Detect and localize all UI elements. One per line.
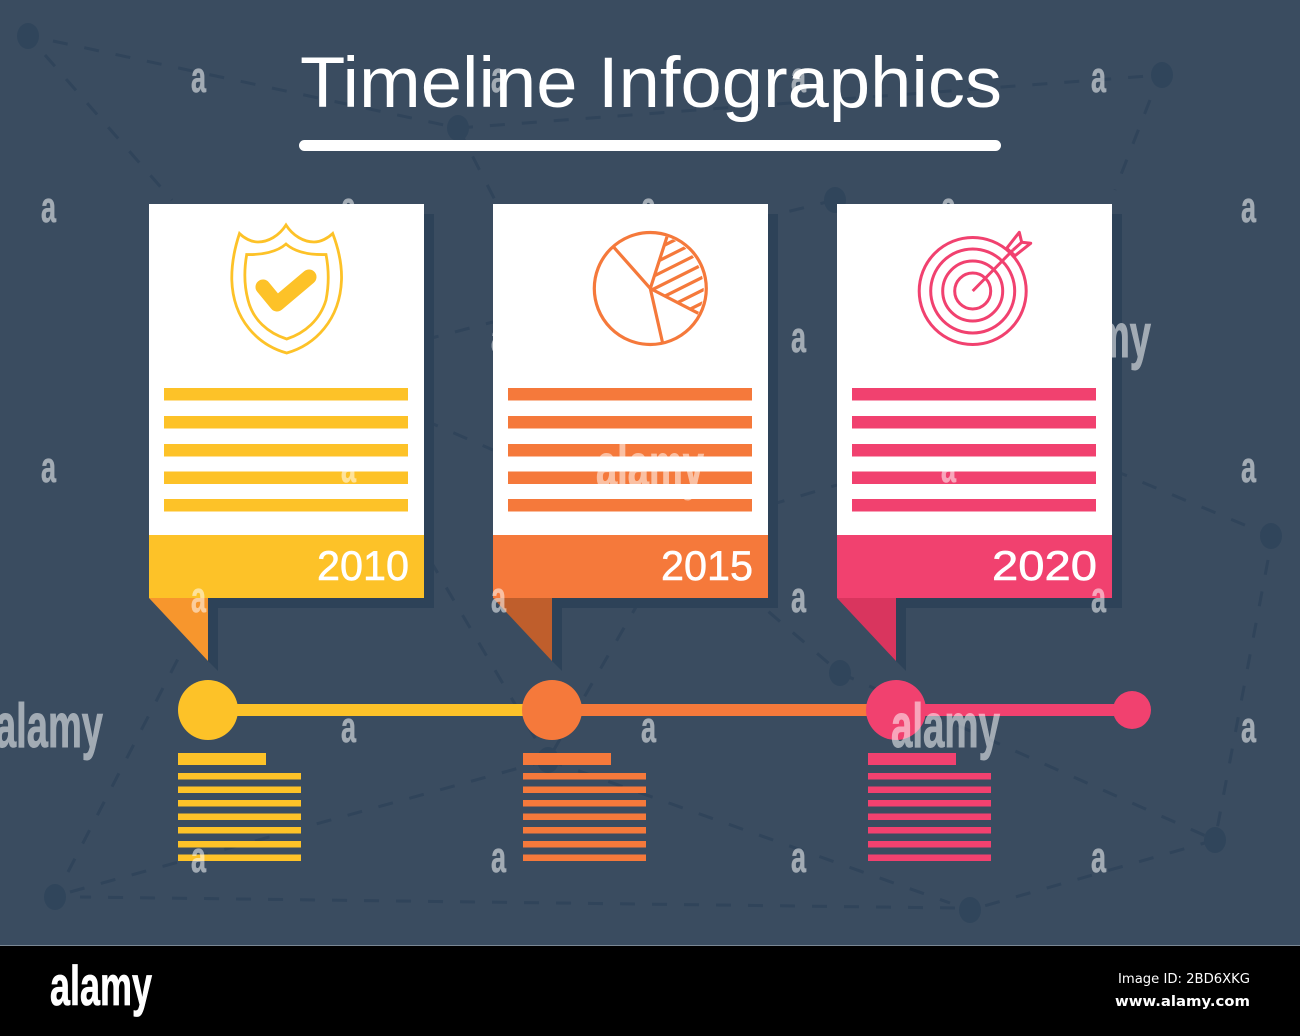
title underline (299, 140, 1001, 151)
watermark marks: a (491, 573, 506, 622)
text block: 2010 (178, 753, 301, 861)
year label 2020: 2020 (992, 542, 1097, 589)
text lines (508, 388, 752, 512)
node 2015 (522, 680, 582, 740)
end node (1113, 691, 1151, 729)
year label 2015: 2015 (661, 542, 753, 589)
watermark marks: a (1091, 53, 1106, 102)
watermark marks: a (41, 443, 56, 492)
watermark marks: a (791, 53, 806, 102)
title: Timeline Infographics (300, 44, 1002, 123)
footer bar (0, 945, 1300, 1036)
icon: target with arrow (919, 232, 1031, 344)
pointer tail (149, 598, 208, 661)
node 2010 (178, 680, 238, 740)
panel: 2010 card (149, 204, 434, 671)
year label 2010: 2010 (317, 542, 409, 589)
watermark marks: alamy (891, 692, 1000, 761)
watermark marks: a (1241, 703, 1256, 752)
watermark marks: a (491, 833, 506, 882)
watermark marks: a (641, 183, 656, 232)
watermark marks: a (191, 833, 206, 882)
text lines (164, 388, 408, 512)
watermark marks: a (191, 573, 206, 622)
watermark marks: a (341, 703, 356, 752)
watermark marks: a (1091, 833, 1106, 882)
year band 2010 (149, 535, 424, 598)
pointer tail (837, 598, 896, 661)
footer logo: alamy (50, 954, 152, 1017)
panel: 2020 card (837, 204, 1122, 671)
watermark marks: a (491, 313, 506, 362)
watermark marks: a (491, 53, 506, 102)
watermark marks: alamy (1043, 302, 1151, 371)
timeline (178, 680, 1151, 740)
pointer tail (493, 598, 552, 661)
watermark marks: a (941, 443, 956, 492)
watermark marks: a (641, 703, 656, 752)
text block: 2020 (868, 753, 991, 861)
watermark marks: a (341, 443, 356, 492)
watermark marks: a (791, 313, 806, 362)
text lines (852, 388, 1096, 512)
watermark marks: a (1241, 183, 1256, 232)
watermark marks: a (941, 183, 956, 232)
icon: pie chart (592, 230, 708, 346)
watermark marks: a (791, 573, 806, 622)
watermark marks: a (791, 833, 806, 882)
watermark marks: alamy (596, 432, 704, 501)
watermark marks: a (1241, 443, 1256, 492)
node 2020 (866, 680, 926, 740)
panel: 2015 card (493, 204, 778, 671)
watermark marks (0, 53, 1256, 882)
watermark marks: a (1091, 573, 1106, 622)
image id: Image ID: 2BD6XKG (1118, 971, 1250, 987)
icon: shield with check (232, 225, 342, 353)
text block: 2015 (523, 753, 646, 861)
year band 2015 (493, 535, 768, 598)
watermark marks: a (341, 183, 356, 232)
watermark marks: a (41, 183, 56, 232)
year band 2020 (837, 535, 1112, 598)
watermark marks: a (191, 53, 206, 102)
watermark marks: alamy (0, 692, 103, 761)
website: www.alamy.com (1115, 994, 1250, 1010)
